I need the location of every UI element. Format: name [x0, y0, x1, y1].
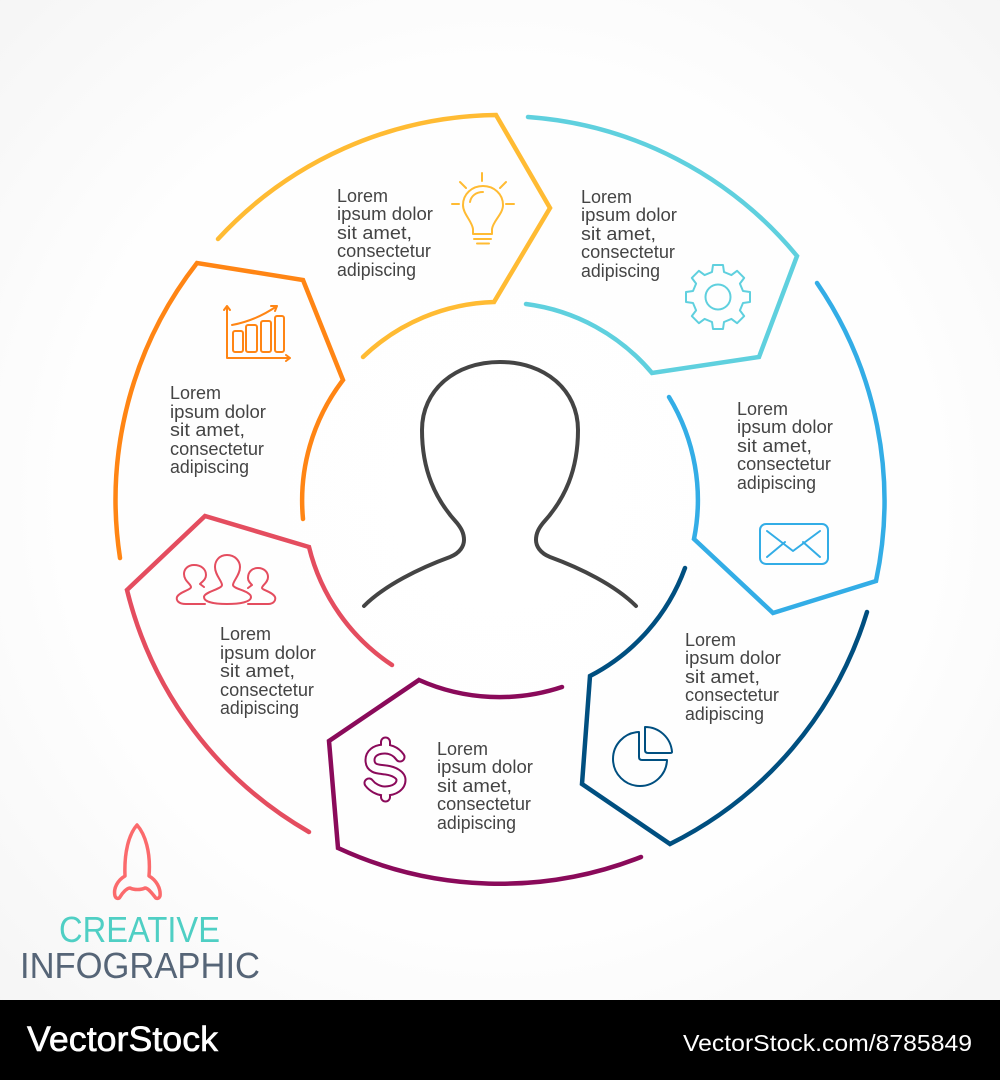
icon: gear — [686, 265, 750, 329]
icon: bar chart — [224, 306, 290, 361]
text: purple segment: Lorem — [437, 739, 488, 759]
text: light blue segment: ipsum dolor — [737, 417, 833, 437]
segment: orange — [116, 263, 343, 558]
text: yellow segment: ipsum dolor — [337, 204, 433, 224]
text: orange segment: consectetur — [170, 439, 264, 459]
text: cyan segment: adipiscing — [581, 261, 660, 281]
text: cyan segment: consectetur — [581, 242, 675, 262]
text: orange segment: Lorem — [170, 383, 221, 403]
text: light blue segment: sit amet, — [737, 436, 812, 456]
text: red segment: consectetur — [220, 680, 314, 700]
text: red segment — [220, 624, 316, 718]
text: light blue segment: consectetur — [737, 454, 831, 474]
segment: cyan — [526, 117, 797, 373]
text: light blue segment: Lorem — [737, 399, 788, 419]
text: light blue segment — [737, 399, 833, 493]
text: yellow segment: sit amet, — [337, 223, 412, 243]
text: yellow segment: consectetur — [337, 241, 431, 261]
footer bar — [0, 1000, 1000, 1080]
text: purple segment: ipsum dolor — [437, 757, 533, 777]
text: red segment: ipsum dolor — [220, 643, 316, 663]
text: purple segment: adipiscing — [437, 813, 516, 833]
icon: rocket — [115, 825, 160, 898]
segment: purple — [329, 680, 641, 884]
logo text: INFOGRAPHIC: INFOGRAPHIC — [20, 945, 260, 986]
footer image id: VectorStock.com/8785849 — [683, 1030, 972, 1056]
text: yellow segment: Lorem — [337, 186, 388, 206]
text: navy segment — [685, 630, 781, 724]
text: navy segment: adipiscing — [685, 704, 764, 724]
text: red segment: adipiscing — [220, 698, 299, 718]
segment: red — [127, 516, 392, 832]
text: navy segment: sit amet, — [685, 667, 760, 687]
footer brand: VectorStock — [27, 1020, 219, 1059]
logo text: CREATIVE: CREATIVE — [59, 909, 220, 950]
text: orange segment — [170, 383, 266, 477]
icon: light bulb — [452, 173, 514, 244]
text: red segment: sit amet, — [220, 661, 295, 681]
text: orange segment: ipsum dolor — [170, 402, 266, 422]
icon: envelope — [760, 524, 828, 564]
text: cyan segment: ipsum dolor — [581, 205, 677, 225]
text: yellow segment — [337, 186, 433, 280]
text: navy segment: ipsum dolor — [685, 648, 781, 668]
text: cyan segment: sit amet, — [581, 224, 656, 244]
center person silhouette — [364, 362, 636, 606]
text: navy segment: Lorem — [685, 630, 736, 650]
text: purple segment — [437, 739, 533, 833]
text: purple segment: consectetur — [437, 794, 531, 814]
segment: navy — [582, 568, 867, 844]
icon: people — [177, 555, 275, 604]
icon: dollar sign — [369, 742, 401, 797]
text: cyan segment — [581, 187, 677, 281]
text: cyan segment: Lorem — [581, 187, 632, 207]
segment: light blue — [669, 283, 884, 613]
text: orange segment: sit amet, — [170, 420, 245, 440]
segment: yellow — [218, 115, 550, 357]
text: purple segment: sit amet, — [437, 776, 512, 796]
text: orange segment: adipiscing — [170, 457, 249, 477]
text: yellow segment: adipiscing — [337, 260, 416, 280]
text: light blue segment: adipiscing — [737, 473, 816, 493]
icon: pie chart — [613, 727, 672, 786]
text: navy segment: consectetur — [685, 685, 779, 705]
text: red segment: Lorem — [220, 624, 271, 644]
